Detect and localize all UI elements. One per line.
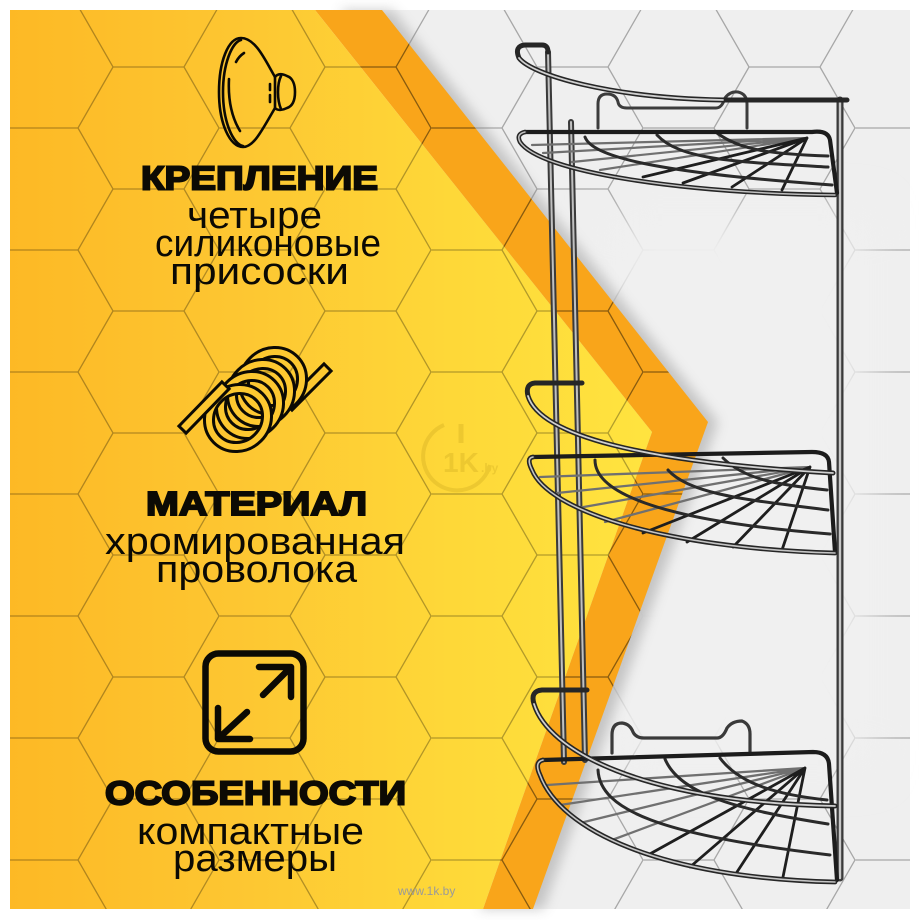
text: хромированная проволока (105, 521, 405, 591)
icon: resize arrows in square (206, 654, 304, 752)
honeycomb on grey tile (408, 10, 910, 909)
text: четыре силиконовые присоски: четыре (187, 195, 322, 237)
text: хромированная проволока: проволока (156, 549, 358, 591)
watermark: 1K.by logo: 1K (443, 447, 479, 478)
text: четыре силиконовые присоски: силиконовые (155, 223, 381, 265)
watermark: www.1k.by: www.1k.by (397, 884, 455, 898)
text: четыре силиконовые присоски: присоски (170, 251, 349, 293)
honeycomb on yellow panel (10, 10, 636, 909)
watermark: 1K.by logo (423, 424, 499, 490)
shadow of orange chevron (340, 10, 718, 909)
middle shelf (527, 383, 835, 553)
watermark: 1K.by logo: .by (481, 461, 499, 475)
icon: wire coil (186, 340, 324, 459)
yellow panel (10, 10, 652, 909)
heading: материал: МАТЕРИАЛ (146, 485, 367, 522)
product: chrome corner shelf (517, 45, 847, 882)
heading: крепление: КРЕПЛЕНИЕ (141, 160, 378, 196)
orange chevron band (315, 10, 708, 909)
text: четыре силиконовые присоски (155, 195, 381, 293)
text: компактные размеры (137, 811, 364, 880)
soft fade over central tile lines (610, 215, 870, 765)
text: компактные размеры: размеры (173, 838, 337, 880)
icon: suction cup (219, 38, 295, 147)
rear poles (548, 52, 840, 878)
top shelf (517, 45, 847, 195)
heading: особенности: ОСОБЕННОСТИ (105, 774, 406, 812)
text: хромированная проволока: хромированная (105, 521, 405, 563)
text: компактные размеры: компактные (137, 811, 364, 853)
honeycomb on orange band (360, 44, 682, 909)
bottom shelf (533, 690, 837, 882)
